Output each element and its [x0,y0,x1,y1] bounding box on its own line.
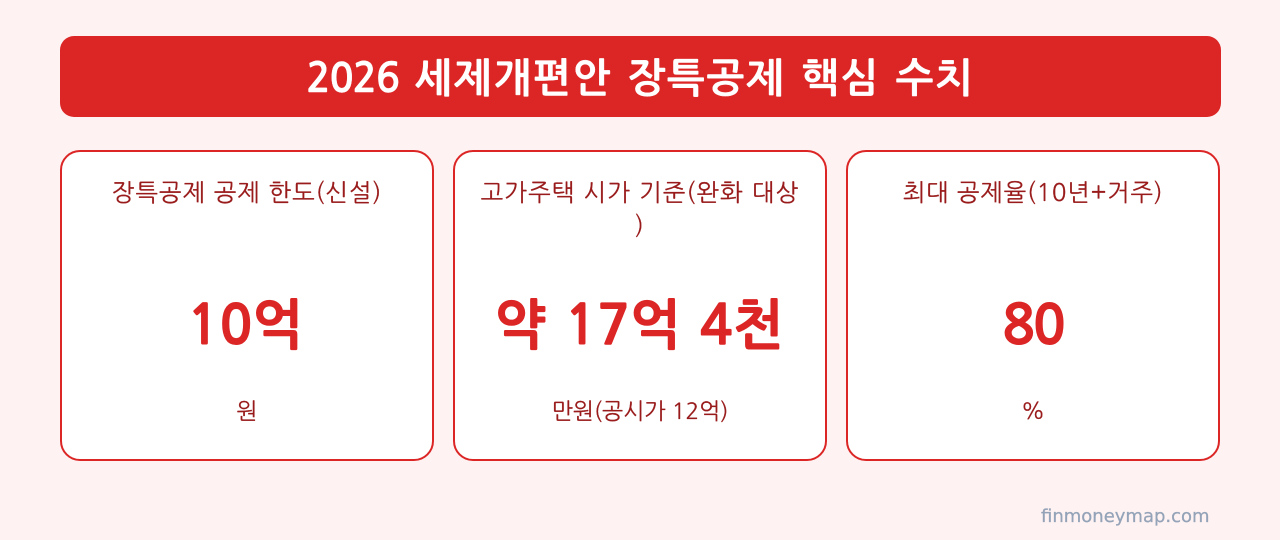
card unit: % [1021,401,1045,423]
footer source: finmoneymap.com [1041,506,1210,527]
card label [481,180,799,238]
card label: 고가주택 시가 기준(완화 대상 [481,181,799,205]
card value: 80 [1002,300,1064,353]
card unit: 만원(공시가 12억) [552,401,728,423]
title banner: 2026 세제개편안 장특공제 핵심 수치 [306,58,975,98]
title banner [60,36,1221,117]
card label: 장특공제 공제 한도(신설) [112,181,382,205]
panel: deduction limit [60,150,434,461]
card label: ) [635,214,645,238]
card label: 최대 공제율(10년+거주) [903,181,1163,205]
card value: 10억 [187,300,303,353]
card value: 약 17억 4천 [495,300,783,353]
card unit: 원 [236,401,258,423]
panel: high-priced home threshold [453,150,827,461]
panel: maximum deduction rate [846,150,1220,461]
